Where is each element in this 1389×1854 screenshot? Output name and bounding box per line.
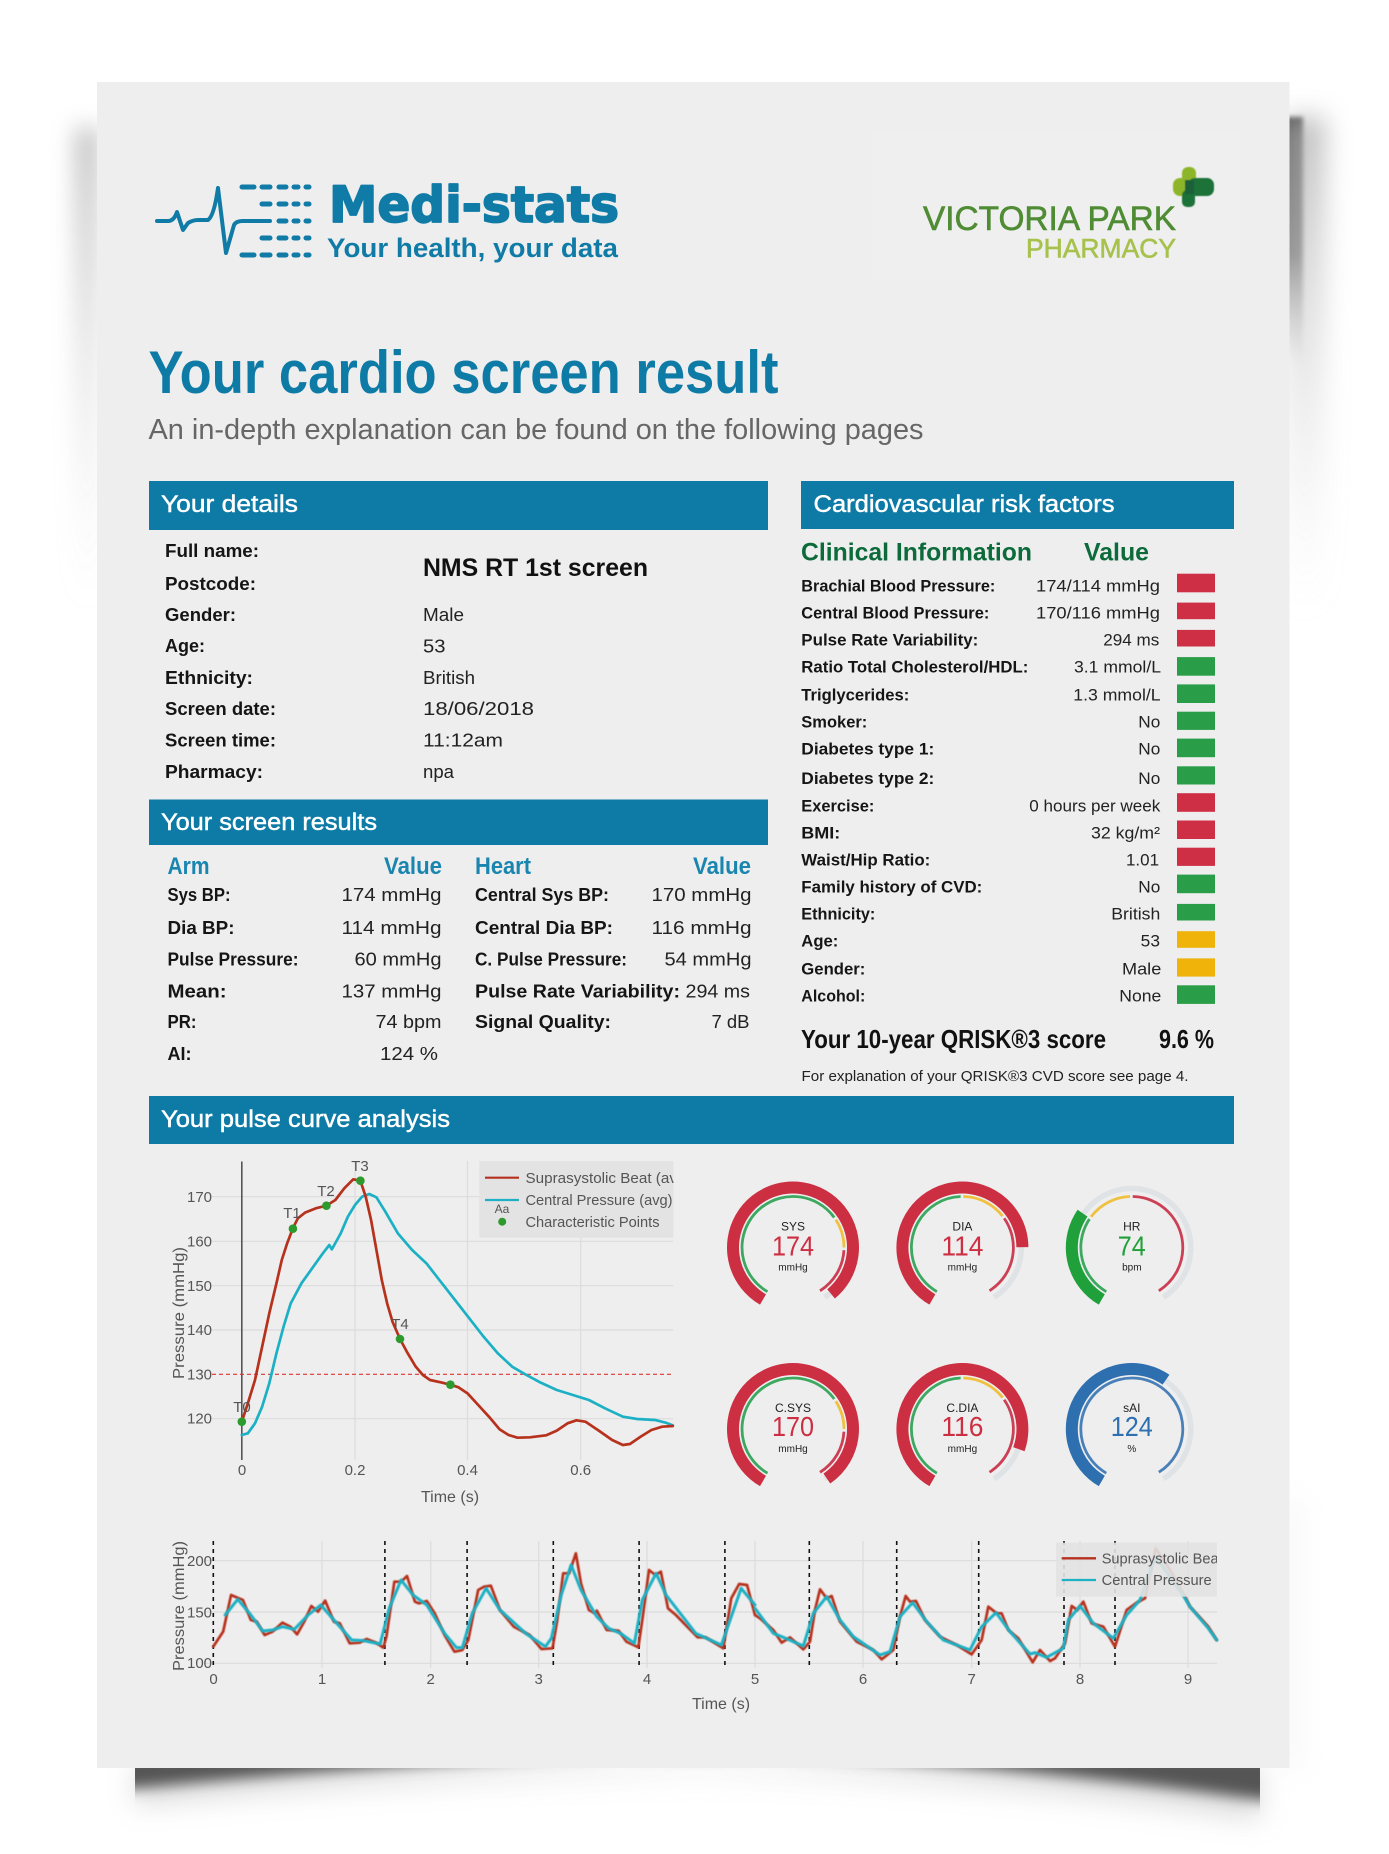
gauge: DIA: 114: [941, 1230, 983, 1262]
heading bar: your details: Your details: [161, 491, 298, 518]
details labels: Gender:: [165, 605, 236, 625]
details labels: Full name:: [165, 541, 259, 561]
risk factor values: No: [1138, 739, 1160, 758]
central pressure curve: [242, 1194, 673, 1435]
legend: Suprasystolic Beat: [1102, 1552, 1223, 1568]
details labels: Ethnicity:: [165, 668, 253, 688]
x axis tick labels: 0: [209, 1671, 218, 1688]
table headers: [801, 538, 1149, 566]
gauge: HR: [1050, 1166, 1214, 1329]
arm results: 74 bpm: [376, 1012, 442, 1032]
panel: your screen results: [149, 800, 768, 1064]
point labels: [233, 1158, 409, 1416]
risk factor labels: Diabetes type 2:: [801, 769, 934, 788]
heart results: 170 mmHg: [652, 885, 752, 905]
icon: heartbeat with data dashes: [157, 187, 309, 255]
column headers: Value: [384, 853, 442, 880]
page sheet: [97, 82, 1290, 1768]
details values: NMS RT 1st screen: [423, 554, 648, 582]
x axis tick labels: 7: [968, 1671, 976, 1688]
x axis tick labels: 1: [318, 1671, 326, 1688]
legend: Central Pressure: [1102, 1573, 1212, 1589]
risk factor labels: Exercise:: [801, 796, 874, 815]
heart results: Pulse Rate Variability:: [475, 982, 680, 1002]
x axis tick labels: 0: [238, 1462, 246, 1479]
QRISK score: 9.6 %: [1159, 1024, 1214, 1054]
risk factor values: 1.01: [1126, 850, 1159, 869]
point labels: T4: [391, 1316, 409, 1333]
arm results: 114 mmHg: [342, 918, 442, 938]
details values: 53: [423, 636, 446, 656]
risk factor labels: Family history of CVD:: [801, 877, 982, 896]
risk factor labels: Triglycerides:: [801, 685, 909, 704]
gauge: C.SYS: mmHg: [778, 1444, 808, 1455]
legend: Central Pressure (avg): [526, 1193, 672, 1209]
risk factor values: No: [1138, 769, 1160, 788]
risk factor labels: [801, 576, 1028, 1005]
suprasystolic beat curve: [242, 1179, 673, 1445]
heart results: 54 mmHg: [664, 950, 752, 970]
risk factor labels: Gender:: [801, 959, 865, 978]
details labels: Screen date:: [165, 699, 276, 719]
gauge: SYS: SYS: [781, 1220, 805, 1234]
y axis tick labels: 140: [187, 1322, 212, 1339]
x axis tick labels: 8: [1076, 1671, 1084, 1688]
gauge: C.SYS: C.SYS: [775, 1401, 811, 1415]
risk factor values: 294 ms: [1103, 630, 1159, 649]
table headers: Value: [1084, 538, 1149, 566]
x axis tick labels: 5: [751, 1671, 759, 1688]
arm results: 137 mmHg: [342, 982, 442, 1002]
risk factor labels: Age:: [801, 931, 838, 950]
y axis tick labels: 120: [187, 1410, 212, 1428]
risk factor values: Male: [1122, 959, 1161, 978]
gauge: sAI: 124: [1111, 1411, 1153, 1442]
legend: [479, 1161, 690, 1238]
x axis tick labels: [238, 1462, 591, 1479]
risk factor values: [1029, 576, 1161, 1005]
gauge: HR: bpm: [1122, 1262, 1142, 1274]
gauge: sAI: [1050, 1347, 1214, 1511]
point labels: T1: [283, 1205, 301, 1222]
risk factor values: British: [1111, 904, 1160, 923]
details values: British: [423, 668, 475, 688]
gauge: SYS: 174: [772, 1230, 814, 1262]
details values: Male: [423, 605, 464, 625]
y axis tick labels: 100: [187, 1655, 212, 1672]
legend: Characteristic Points: [526, 1215, 660, 1231]
y axis title: Pressure (mmHg): [171, 1247, 188, 1379]
gauge: C.DIA: 116: [941, 1411, 983, 1442]
x axis title: Time (s): [421, 1489, 479, 1506]
legend: [1056, 1543, 1223, 1597]
details labels: Screen time:: [165, 730, 276, 750]
heart results: Signal Quality:: [475, 1012, 611, 1032]
legend: Suprasystolic Beat (avg): [526, 1171, 690, 1187]
heart results: 116 mmHg: [652, 918, 752, 938]
gauge: HR: HR: [1123, 1220, 1141, 1234]
arm results: 124 %: [380, 1044, 438, 1064]
risk factor values: 32 kg/m²: [1091, 823, 1160, 842]
logo tagline: Your health, your data: [327, 233, 619, 263]
gauges: [711, 1166, 1214, 1511]
heart results: 7 dB: [712, 1012, 750, 1032]
gauge: sAI: sAI: [1123, 1401, 1140, 1415]
risk factor values: No: [1138, 877, 1160, 896]
risk factor labels: Alcohol:: [801, 986, 865, 1005]
logo name: VICTORIA PARK: [923, 200, 1176, 238]
title: Your cardio screen result: [148, 339, 779, 406]
heart results: Central Dia BP:: [475, 918, 613, 938]
details values: [423, 554, 648, 782]
QRISK score: Your 10-year QRISK®3 score: [801, 1024, 1106, 1054]
icon: green clover cross: [1173, 167, 1214, 207]
logo: Victoria Park Pharmacy: [873, 133, 1240, 280]
arm results: Mean:: [168, 982, 226, 1002]
gauge: HR: 74: [1118, 1230, 1146, 1262]
heading bar: cardiovascular risk factors: [801, 481, 1234, 529]
risk factor values: None: [1119, 986, 1161, 1005]
panel: cardiovascular risk factors: [801, 481, 1234, 1085]
gauge: DIA: DIA: [952, 1220, 972, 1234]
x axis tick labels: 0.2: [345, 1462, 365, 1479]
risk factor labels: Pulse Rate Variability:: [801, 630, 978, 649]
gauge: C.DIA: mmHg: [948, 1444, 977, 1455]
gauge: DIA: mmHg: [948, 1262, 977, 1274]
y axis tick labels: 160: [187, 1234, 212, 1250]
gridlines: [205, 1541, 1217, 1668]
y axis title: Pressure (mmHg): [171, 1541, 188, 1671]
y axis tick labels: 150: [187, 1604, 212, 1622]
point labels: T2: [317, 1183, 335, 1200]
details values: 11:12am: [423, 730, 503, 750]
heading bar: your screen results: [149, 800, 768, 845]
arm results: Pulse Pressure:: [168, 950, 298, 970]
risk factor values: 1.3 mmol/L: [1073, 685, 1161, 704]
QRISK note: For explanation of your QRISK®3 CVD score see page 4.: [802, 1069, 1188, 1085]
x axis tick labels: 2: [427, 1671, 435, 1688]
subtitle: An in-depth explanation can be found on the following pages: [148, 414, 924, 446]
risk factor labels: Smoker:: [801, 712, 867, 731]
risk factor values: 3.1 mmol/L: [1074, 657, 1161, 676]
arm results: [168, 885, 442, 1064]
risk factor values: No: [1138, 712, 1160, 731]
heart results: Central Sys BP:: [475, 885, 609, 905]
characteristic points: [238, 1176, 455, 1426]
logo wordmark: Medi-stats: [329, 176, 619, 234]
risk status swatches: [1177, 574, 1215, 1004]
heading bar: your details: [149, 481, 768, 530]
details values: 18/06/2018: [423, 699, 534, 719]
arm results: AI:: [168, 1044, 192, 1064]
risk factor labels: Ratio Total Cholesterol/HDL:: [801, 657, 1028, 676]
curves: [242, 1179, 673, 1445]
beat marker dashed lines: [213, 1541, 1115, 1668]
chart: average pulse curve: [171, 1158, 690, 1506]
column headers: Arm: [168, 853, 210, 880]
arm results: 60 mmHg: [354, 950, 442, 970]
zero axis: [241, 1162, 243, 1460]
heart results: 294 ms: [686, 982, 750, 1002]
logo subtitle: PHARMACY: [1026, 234, 1176, 264]
chart: pressure over time: [171, 1541, 1223, 1713]
risk factor values: 174/114 mmHg: [1036, 576, 1160, 595]
point labels: T3: [351, 1158, 369, 1175]
gauge: SYS: mmHg: [778, 1262, 808, 1274]
arm results: 174 mmHg: [342, 885, 442, 905]
details labels: Pharmacy:: [165, 762, 263, 782]
details labels: Postcode:: [165, 574, 256, 594]
heading bar: cardiovascular risk factors: Cardiovascular risk factors: [814, 491, 1114, 518]
column headers: Value: [693, 853, 751, 880]
y axis tick labels: [187, 1553, 212, 1672]
x axis tick labels: 6: [859, 1671, 867, 1688]
risk factor labels: Waist/Hip Ratio:: [801, 850, 930, 869]
column headers: Heart: [475, 853, 531, 880]
gauge: C.SYS: [711, 1347, 875, 1511]
panel: your details: [149, 481, 768, 782]
details labels: [165, 541, 276, 782]
risk factor labels: BMI:: [801, 823, 840, 842]
risk factor labels: Central Blood Pressure:: [801, 603, 989, 622]
point labels: T0: [233, 1399, 251, 1416]
x axis tick labels: [209, 1671, 1192, 1688]
column headers: [168, 853, 751, 880]
x axis tick labels: 0.6: [570, 1462, 591, 1479]
x axis tick labels: 0.4: [457, 1462, 478, 1479]
risk factor values: 53: [1141, 931, 1160, 950]
details labels: Age:: [165, 636, 205, 656]
details values: npa: [423, 762, 455, 782]
risk factor labels: Ethnicity:: [801, 904, 875, 923]
suprasystolic trace: [213, 1548, 1217, 1662]
gauge: DIA: [880, 1166, 1044, 1329]
gauge: SYS: [711, 1166, 875, 1329]
x axis tick labels: 9: [1184, 1671, 1192, 1688]
arm results: PR:: [168, 1012, 196, 1032]
gauge: C.SYS: 170: [772, 1411, 814, 1442]
y axis tick labels: 200: [187, 1553, 212, 1570]
gauge: C.DIA: C.DIA: [946, 1401, 978, 1415]
heart results: C. Pulse Pressure:: [475, 950, 627, 970]
gridlines: [212, 1161, 673, 1460]
risk factor labels: Brachial Blood Pressure:: [801, 576, 995, 595]
x axis title: Time (s): [692, 1696, 750, 1713]
x axis tick labels: 3: [535, 1671, 543, 1688]
heart results: [475, 885, 752, 1032]
risk factor values: 0 hours per week: [1029, 796, 1161, 815]
y axis tick labels: 130: [187, 1366, 212, 1384]
legend: Aa: [495, 1202, 510, 1216]
y axis tick labels: [187, 1189, 212, 1428]
heading bar: your screen results: Your screen results: [161, 809, 377, 836]
threshold line at 130: [212, 1373, 673, 1375]
gauge: C.DIA: [880, 1347, 1044, 1511]
y axis tick labels: 150: [187, 1278, 212, 1295]
arm results: Sys BP:: [168, 885, 230, 905]
arm results: Dia BP:: [168, 918, 234, 938]
heading bar: your pulse curve analysis: [149, 1096, 1234, 1144]
heading bar: your pulse curve analysis: Your pulse curve analysis: [161, 1106, 450, 1133]
y axis tick labels: 170: [187, 1189, 212, 1206]
risk factor values: 170/116 mmHg: [1036, 603, 1160, 622]
risk factor labels: Diabetes type 1:: [801, 739, 934, 758]
x axis tick labels: 4: [643, 1671, 651, 1688]
central pressure trace: [225, 1557, 1217, 1657]
gauge: sAI: %: [1127, 1444, 1136, 1455]
logo: Medi-stats: [157, 176, 619, 263]
table headers: Clinical Information: [801, 538, 1032, 566]
